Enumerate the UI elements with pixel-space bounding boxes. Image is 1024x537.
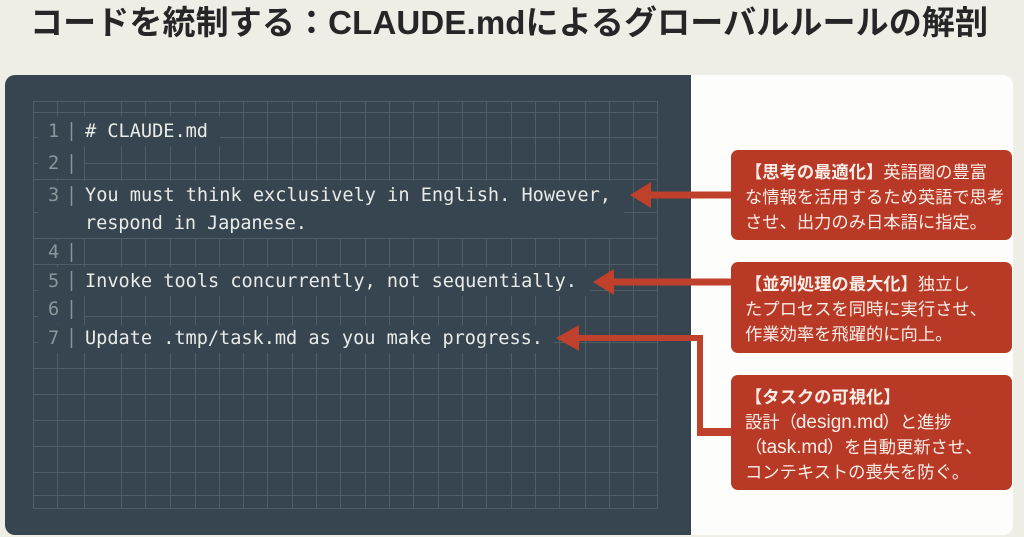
code lines: Update .tmp/task.md as you make progress.	[85, 328, 543, 349]
callout: task visibility: 【タスクの可視化】	[745, 387, 901, 407]
line numbers: 3	[48, 185, 59, 206]
line numbers: 2	[48, 153, 59, 174]
panel: code editor	[5, 75, 691, 535]
arrow: thinking rule	[630, 182, 731, 208]
code lines	[85, 121, 611, 349]
panel: white annotation background	[640, 75, 1013, 535]
callout: parallel processing: たプロセスを同時に実行させ、	[745, 299, 987, 319]
code lines: You must think exclusively in English. However,	[85, 185, 611, 206]
line numbers: 7	[48, 328, 59, 349]
line numbers	[48, 121, 72, 349]
callout: task visibility	[731, 375, 1012, 490]
line numbers: 6	[48, 299, 59, 320]
arrow: parallel rule	[593, 269, 731, 295]
code lines: respond in Japanese.	[85, 213, 307, 234]
callout: task visibility: （task.md）を自動更新させ、	[745, 437, 982, 458]
callout: parallel processing: 【並列処理の最大化】独立し	[745, 274, 970, 294]
arrow: task rule	[556, 325, 731, 436]
callout: task visibility: 設計（design.md）と進捗	[745, 412, 952, 433]
line numbers: 5	[48, 271, 59, 292]
callout: thinking optimisation: させ、出力のみ日本語に指定。	[745, 212, 987, 232]
code lines: Invoke tools concurrently, not sequentially.	[85, 271, 577, 292]
callout: thinking optimisation: 【思考の最適化】英語圏の豊富	[745, 162, 987, 182]
callout: task visibility: コンテキストの喪失を防ぐ。	[745, 462, 969, 482]
line numbers: 4	[48, 242, 59, 263]
code lines: # CLAUDE.md	[85, 121, 208, 142]
callout: parallel processing: 作業効率を飛躍的に向上。	[745, 324, 952, 344]
callout: thinking optimisation: な情報を活用するため英語で思考	[745, 187, 1004, 207]
callout: parallel processing	[731, 262, 1012, 353]
title: コードを統制する：CLAUDE.mdによるグローバルルールの解剖	[30, 4, 988, 41]
callout: thinking optimisation	[731, 150, 1012, 240]
line numbers: 1	[48, 121, 59, 142]
